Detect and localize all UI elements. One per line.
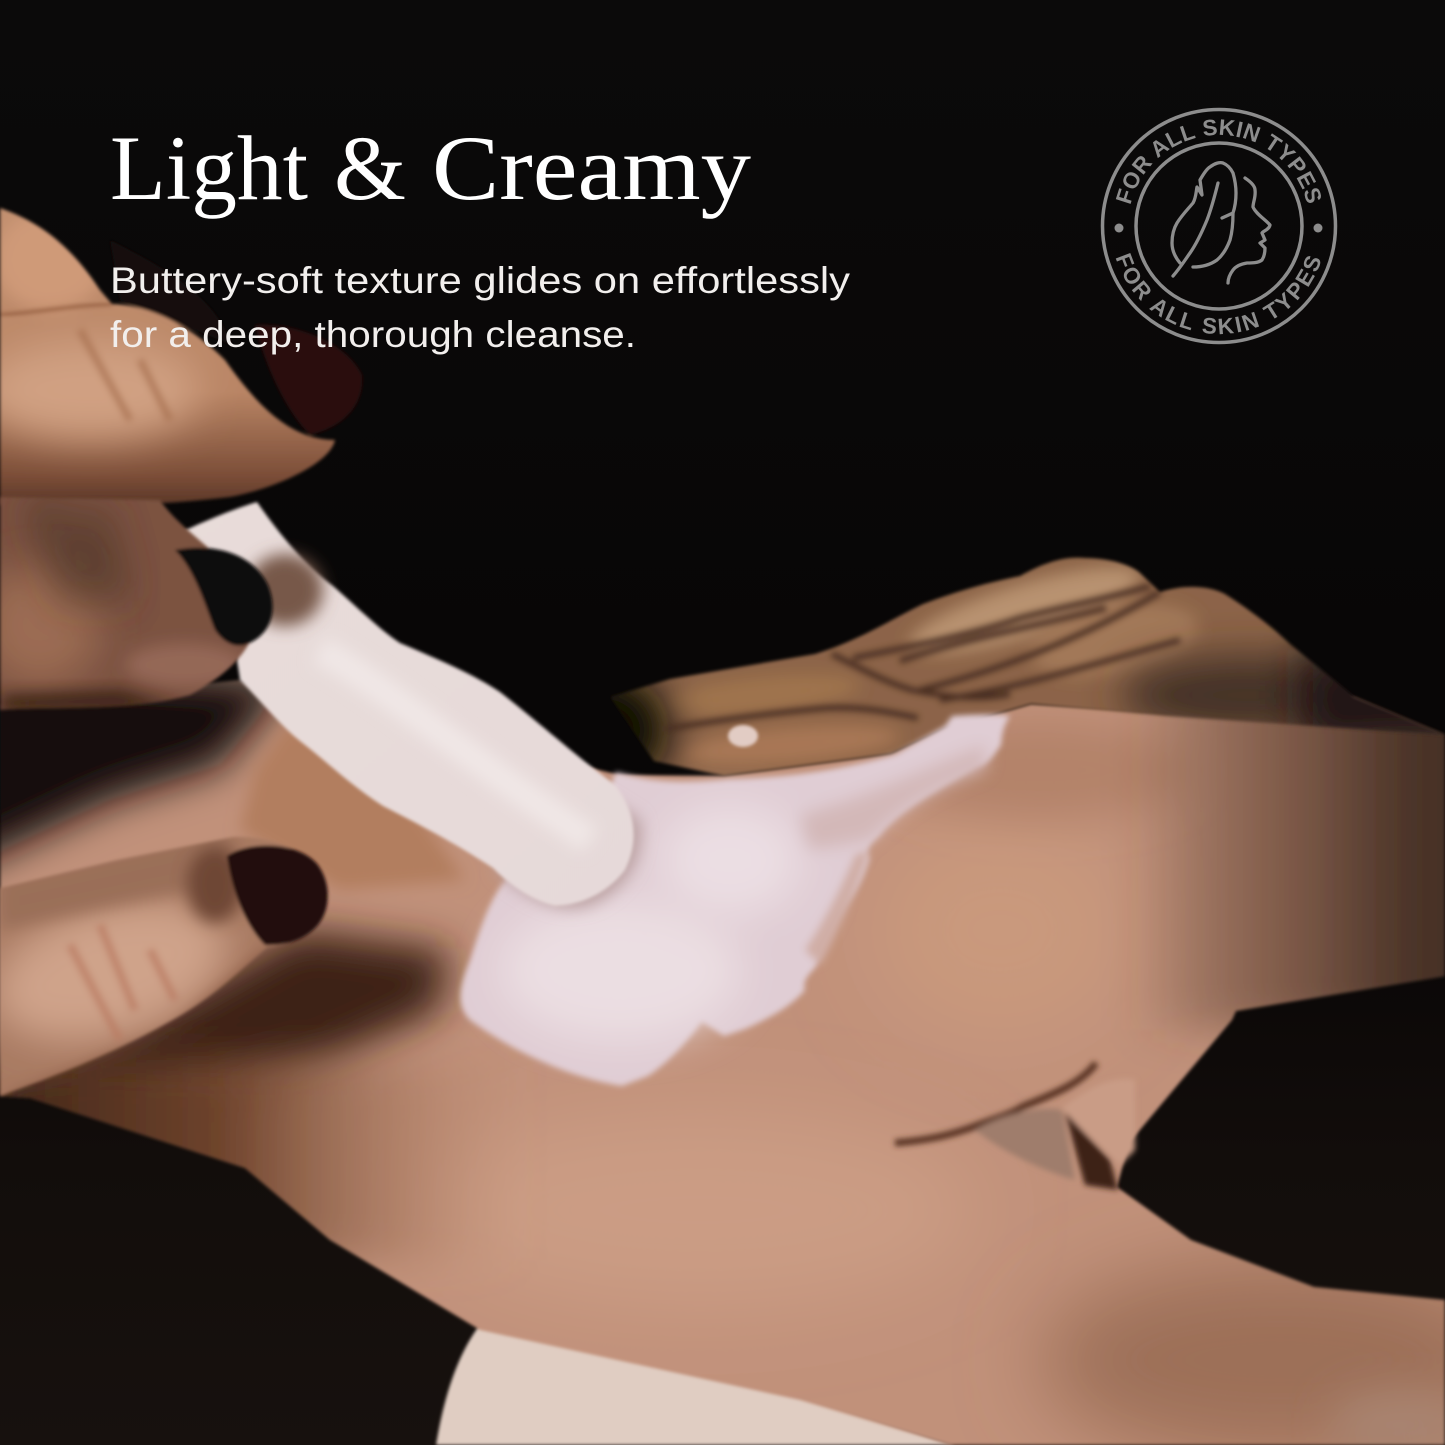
icon: feather: [1172, 163, 1236, 276]
body text: Buttery-soft texture glides on effortlessly: [110, 260, 851, 301]
palm shadows: [0, 660, 290, 880]
photo: middle finger: [0, 490, 280, 720]
nail: top finger dark: [110, 240, 232, 345]
body text: [110, 260, 851, 355]
photo: top finger: [0, 200, 362, 520]
photo: cream on skin: [461, 714, 1010, 1086]
badge text top: FOR ALL SKIN TYPES: [1116, 119, 1321, 204]
photo: bottom finger: [0, 836, 330, 1098]
photo: cream drop on knuckle: [728, 725, 758, 747]
title: &: [334, 117, 406, 219]
body text: for a deep, thorough cleanse.: [110, 314, 636, 355]
title: Light: [110, 117, 308, 219]
badge text bottom: FOR ALL SKIN TYPES: [1116, 253, 1320, 334]
photo: back of hand knuckles: [612, 555, 1442, 776]
badge: for all skin types: [1100, 108, 1338, 344]
shaded right side: [1130, 680, 1445, 1030]
nail: middle finger: [175, 548, 273, 646]
title: [110, 117, 751, 219]
nail: top finger: [255, 325, 362, 435]
photo: spatula covered in cream: [165, 502, 641, 908]
icon: face profile: [1228, 178, 1270, 283]
title: Creamy: [432, 117, 751, 219]
nail: bottom finger: [227, 846, 328, 945]
photo: bottle at bottom: [436, 1322, 955, 1445]
photo: thumb web crease: [895, 1063, 1135, 1190]
photo: receiving hand: [0, 678, 1445, 1445]
